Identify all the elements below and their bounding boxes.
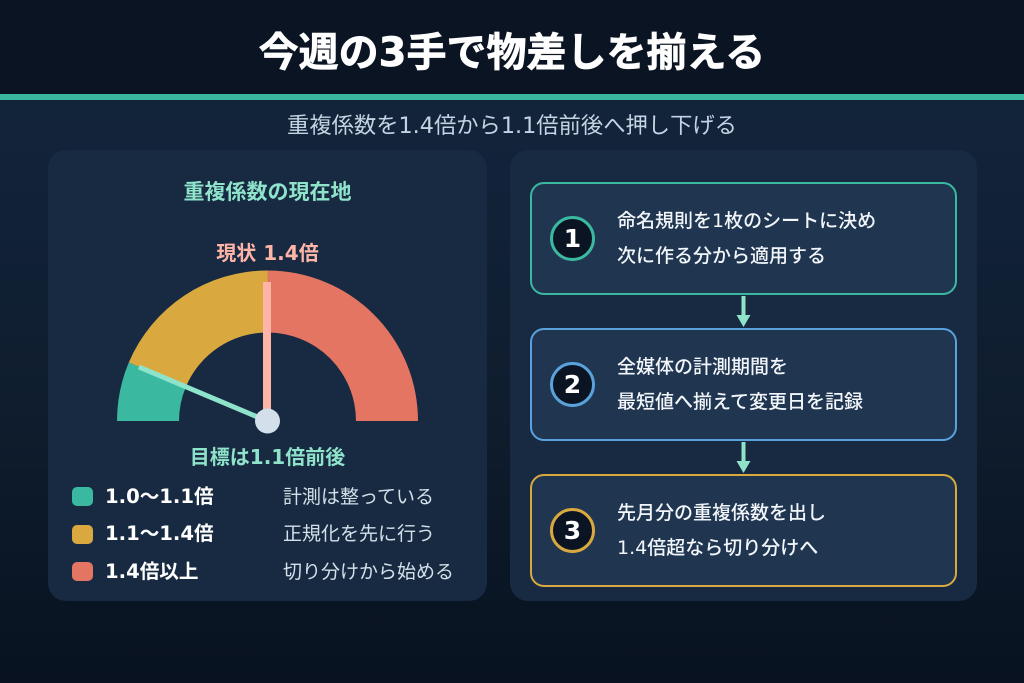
panel: gauge	[48, 150, 487, 601]
step 2 text: 最短値へ揃えて変更日を記録	[617, 390, 863, 412]
segment: teal	[117, 362, 186, 421]
step 1	[530, 182, 957, 295]
segment: yellow	[129, 270, 268, 387]
current value label: 現状 1.4倍	[216, 241, 319, 265]
header band	[0, 0, 1024, 94]
header accent line	[0, 94, 1024, 100]
needle: current	[263, 282, 271, 421]
legend: 正規化を先に行う	[283, 523, 435, 545]
gauge heading: 重複係数の現在地	[184, 180, 352, 204]
step 1 text: 命名規則を1枚のシートに決め	[617, 210, 876, 232]
segment: red	[268, 270, 418, 421]
legend: 1.0〜1.1倍	[105, 485, 214, 508]
step 3	[530, 474, 957, 587]
number 2: 2	[564, 370, 581, 399]
legend: 1.4倍以上	[105, 560, 198, 583]
step 2 text	[617, 356, 863, 412]
step 1 text: 次に作る分から適用する	[617, 244, 826, 266]
subtitle: 重複係数を1.4倍から1.1倍前後へ押し下げる	[287, 113, 737, 139]
step 3 text: 1.4倍超なら切り分けへ	[617, 536, 818, 558]
panel: steps	[510, 150, 977, 601]
step 1 text	[617, 210, 876, 266]
target label: 目標は1.1倍前後	[190, 445, 345, 469]
number 3: 3	[564, 516, 581, 545]
arrow 1	[736, 296, 750, 327]
number 1: 1	[564, 224, 581, 253]
legend	[72, 485, 454, 583]
number 3	[550, 508, 595, 553]
step 2 text: 全媒体の計測期間を	[617, 356, 788, 378]
title: 今週の3手で物差しを揃える	[259, 30, 765, 76]
arrow 2	[736, 442, 750, 473]
legend: 1.1〜1.4倍	[105, 522, 214, 545]
legend: 計測は整っている	[283, 486, 434, 508]
needle: target	[139, 367, 267, 421]
number 1	[550, 216, 595, 261]
legend: 切り分けから始める	[283, 561, 454, 583]
step 3 text	[617, 502, 826, 558]
step 2	[530, 328, 957, 441]
gauge chart	[117, 270, 418, 434]
step 3 text: 先月分の重複係数を出し	[617, 502, 826, 524]
needle hub	[255, 408, 280, 434]
number 2	[550, 362, 595, 407]
